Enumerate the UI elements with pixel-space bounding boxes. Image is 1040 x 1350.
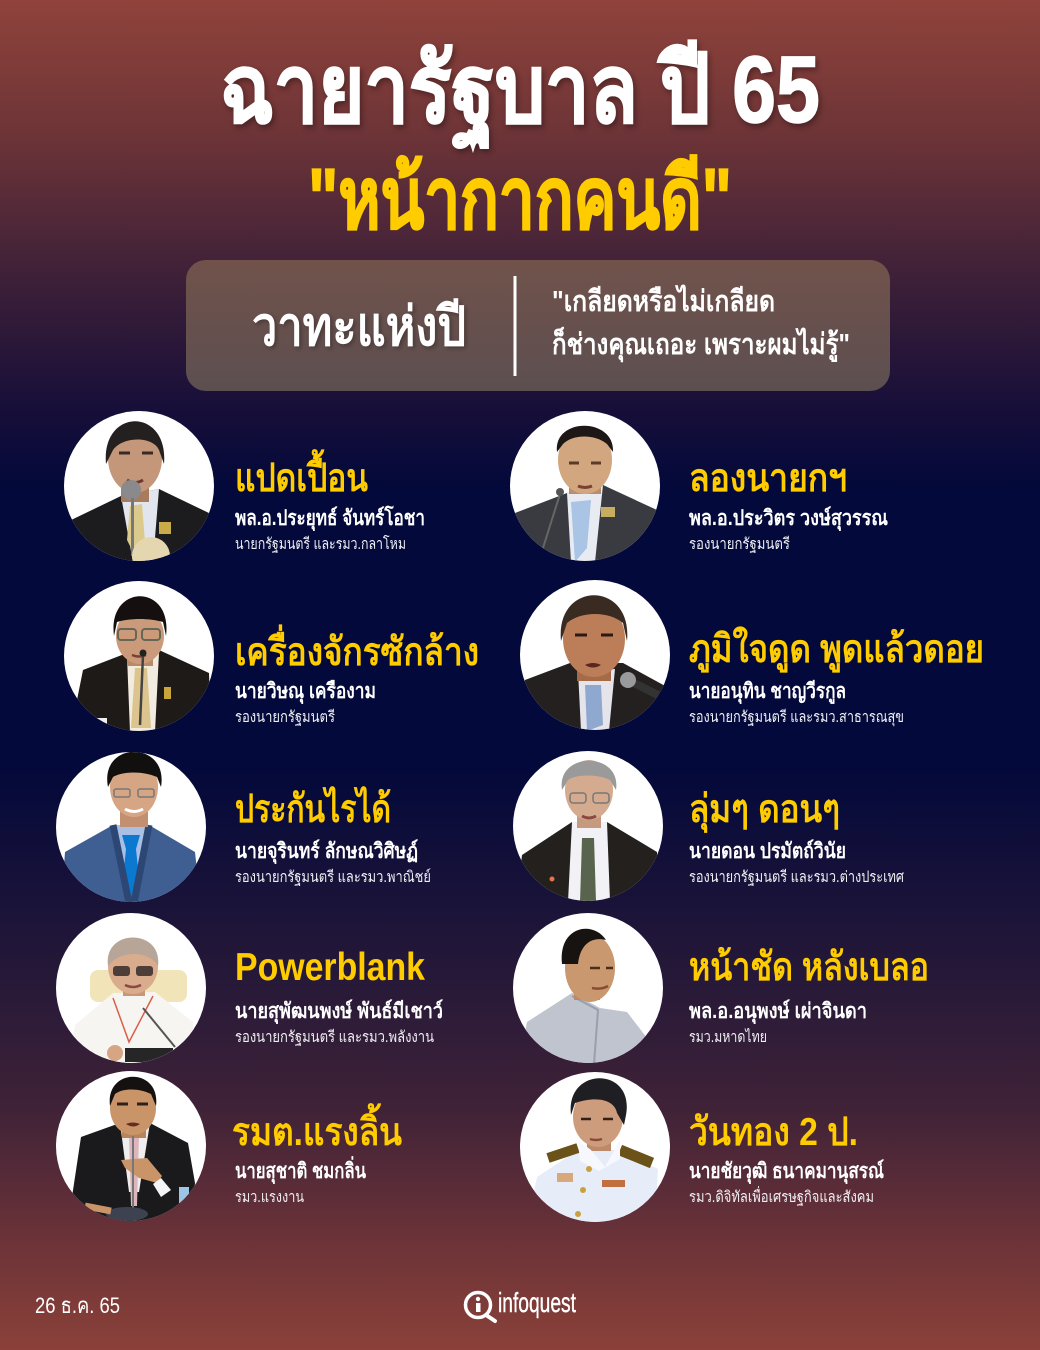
text: Anupong: พล.อ.อนุพงษ์ เผ่าจินดา xyxy=(689,999,867,1025)
quote text: "เกลียดหรือไม่เกลียด xyxy=(552,284,775,318)
text: Prayut: แปดเปื้อน xyxy=(235,449,368,500)
panel: Prayut xyxy=(63,411,425,575)
portrait: Prayut xyxy=(63,411,215,575)
portrait: Wissanu xyxy=(64,581,214,736)
portrait: Supattanapong xyxy=(56,913,206,1068)
text: Prawit xyxy=(689,457,888,553)
text: Anupong xyxy=(689,946,929,1046)
panel: Anutin xyxy=(519,580,984,735)
text: Anupong: หน้าชัด หลังเบลอ xyxy=(689,946,929,989)
text: Prayut xyxy=(235,449,425,553)
subtitle: "หน้ากากคนดี" xyxy=(308,152,732,247)
text: Prayut: นายกรัฐมนตรี และรมว.กลาโหม xyxy=(235,535,406,553)
panel: Jurin xyxy=(56,752,431,907)
text: Suchart: นายสุชาติ ชมกลิ่น xyxy=(235,1155,367,1185)
portrait: Don xyxy=(513,751,663,906)
portrait: Prawit xyxy=(509,411,661,566)
text: Jurin: รองนายกรัฐมนตรี และรมว.พาณิชย์ xyxy=(235,868,431,886)
text: Supattanapong xyxy=(235,946,443,1046)
panel: quote of the year xyxy=(186,260,890,391)
text: Jurin xyxy=(235,786,431,886)
text: Chaiwut xyxy=(689,1111,884,1206)
text: Chaiwut: นายชัยวุฒิ ธนาคมานุสรณ์ xyxy=(689,1159,884,1185)
text: Don xyxy=(689,788,904,886)
portrait: Chaiwut xyxy=(520,1072,670,1223)
text: Jurin: นายจุรินทร์ ลักษณวิศิษฏ์ xyxy=(235,839,418,865)
panel: Chaiwut xyxy=(520,1072,884,1223)
logo: infoquest: infoquest xyxy=(498,1287,576,1318)
portrait: Suchart xyxy=(56,1071,206,1226)
panel: Suchart xyxy=(56,1071,402,1226)
text: Anupong: รมว.มหาดไทย xyxy=(689,1028,767,1046)
text: Supattanapong: นายสุพัฒนพงษ์ พันธ์มีเชาว์ xyxy=(235,999,443,1025)
text: Wissanu: นายวิษณุ เครืองาม xyxy=(235,679,376,705)
quote text xyxy=(552,284,850,362)
heading: quote of the year: วาทะแห่งปี xyxy=(252,297,466,357)
text: Prawit: รองนายกรัฐมนตรี xyxy=(689,536,790,553)
panel: Prawit xyxy=(509,411,888,566)
text: Supattanapong: รองนายกรัฐมนตรี และรมว.พลังงาน xyxy=(235,1029,434,1046)
text: Suchart: รมว.แรงงาน xyxy=(235,1189,304,1206)
portrait: Anupong xyxy=(513,913,663,1068)
text: Don: นายดอน ปรมัตถ์วินัย xyxy=(689,839,846,863)
text: Prawit: พล.อ.ประวิตร วงษ์สุวรรณ xyxy=(689,506,888,532)
text: Anutin xyxy=(689,626,984,727)
text: Anutin: ภูมิใจดูด พูดแล้วดอย xyxy=(689,626,984,673)
text: Don: ลุ่มๆ ดอนๆ xyxy=(689,788,840,833)
text: Jurin: ประกันไรได้ xyxy=(235,786,391,831)
text: Wissanu: เครื่องจักรซักล้าง xyxy=(235,624,479,674)
logo: infoquest xyxy=(466,1287,576,1321)
date: 26 ธ.ค. 65 xyxy=(35,1293,120,1318)
text: Wissanu xyxy=(235,624,479,726)
text: Don: รองนายกรัฐมนตรี และรมว.ต่างประเทศ xyxy=(689,869,904,886)
panel: Supattanapong xyxy=(56,913,443,1068)
text: Prawit: ลองนายกฯ xyxy=(689,457,847,500)
text: Suchart xyxy=(232,1103,402,1206)
text: Anutin: รองนายกรัฐมนตรี และรมว.สาธารณสุข xyxy=(689,709,904,727)
portrait: Jurin xyxy=(56,752,206,907)
text: Suchart: รมต.แรงลิ้น xyxy=(232,1103,402,1154)
text: Chaiwut: รมว.ดิจิทัลเพื่อเศรษฐกิจและสังคม xyxy=(689,1186,874,1206)
panel: Don xyxy=(513,751,904,906)
text: Chaiwut: วันทอง 2 ป. xyxy=(689,1111,858,1154)
icon: magnifier with i xyxy=(466,1292,495,1321)
text: Wissanu: รองนายกรัฐมนตรี xyxy=(235,709,335,726)
text: Prayut: พล.อ.ประยุทธ์ จันทร์โอชา xyxy=(235,505,425,532)
panel: Wissanu xyxy=(64,581,479,736)
text: Supattanapong: Powerblank xyxy=(235,946,425,989)
panel: Anupong xyxy=(513,913,929,1068)
quote text: ก็ช่างคุณเถอะ เพราะผมไม่รู้" xyxy=(552,326,850,362)
portrait: Anutin xyxy=(519,580,671,735)
title: ฉายารัฐบาล ปี 65 xyxy=(220,37,820,152)
text: Anutin: นายอนุทิน ชาญวีรกูล xyxy=(689,679,846,705)
